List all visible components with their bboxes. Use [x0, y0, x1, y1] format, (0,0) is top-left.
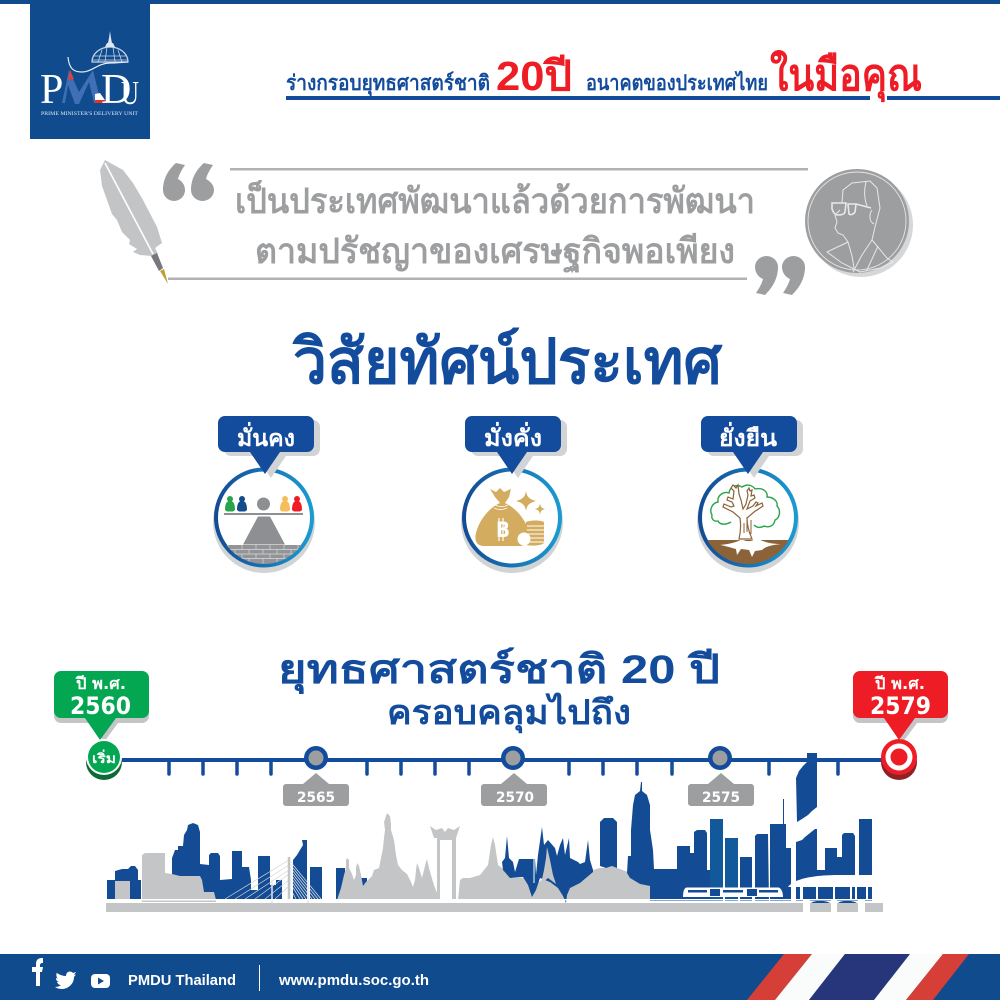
- milestone 2575: [688, 746, 754, 806]
- website: www.pmdu.soc.go.th: [278, 973, 429, 989]
- end callout 2579: 2579: [870, 692, 931, 720]
- elevated station: [788, 875, 872, 900]
- section heading: strategy 20 years: ครอบคลุมไปถึง: [387, 692, 631, 734]
- flag stripes: [747, 954, 969, 1000]
- start marker: เริ่ม: [92, 749, 116, 766]
- icon: twitter: [55, 972, 76, 989]
- section heading: strategy 20 years: ยุทธศาสตร์ชาติ 20 ปี: [278, 647, 720, 695]
- quote rules: [168, 168, 808, 280]
- quote text: เป็นประเทศพัฒนาแล้วด้วยการพัฒนา: [235, 179, 755, 221]
- closing quote mark: [755, 256, 805, 295]
- icon: Wat Arun temple: [337, 813, 438, 900]
- milestone 2570: 2570: [496, 790, 534, 806]
- header title: ร่างกรอบยุทธศาสตร์ชาติ: [286, 71, 490, 97]
- logo: PMDU: PRIME MINISTER'S DELIVERY UNIT: [41, 112, 138, 117]
- section heading: strategy 20 years: [278, 647, 720, 734]
- header title: [286, 49, 922, 103]
- gray temple right: [458, 837, 651, 900]
- icon: youtube: [91, 974, 110, 988]
- end marker: [881, 739, 917, 780]
- milestone 2565: [283, 746, 349, 806]
- milestone 2565: 2565: [297, 790, 335, 806]
- top bar: [0, 0, 1000, 4]
- header rule: [286, 96, 1000, 100]
- quote text: ตามปรัชญาของเศรษฐกิจพอเพียง: [255, 232, 735, 274]
- header title: 20ปี: [496, 53, 572, 99]
- start callout 2560: [54, 671, 149, 742]
- social handle: PMDU Thailand: [128, 973, 236, 989]
- milestone 2575: 2575: [702, 790, 740, 806]
- vision item: ยั่งยืน: ยั่งยืน: [719, 421, 777, 451]
- monorail train: [683, 888, 783, 897]
- icon: royal portrait coin: [805, 169, 913, 277]
- vision item: มั่นคง: [213, 416, 320, 573]
- vision item: มั่งคั่ง: มั่งคั่ง: [484, 421, 542, 451]
- gray buildings left: [115, 853, 216, 902]
- vision item: มั่นคง: มั่นคง: [237, 421, 295, 451]
- start marker: [86, 739, 122, 780]
- ground: [106, 903, 883, 912]
- vision item: มั่งคั่ง: [461, 416, 567, 573]
- timeline: [120, 758, 885, 774]
- header title: ในมือคุณ: [770, 49, 922, 103]
- vision item: มั่งคั่ง: B: [496, 518, 510, 542]
- logo: PMDU: [30, 3, 150, 139]
- icon: Giant Swing: [430, 826, 460, 900]
- vision item: ยั่งยืน: [697, 416, 803, 573]
- logo: PMDU: P: [40, 67, 63, 113]
- blue buildings left: [107, 823, 367, 900]
- quote text: [235, 179, 755, 274]
- milestone 2570: [481, 746, 547, 806]
- main heading: วิสัยทัศน์ประเทศ: [292, 327, 724, 397]
- opening quote mark: [163, 163, 214, 201]
- end callout 2579: [853, 671, 948, 742]
- blue temple: [502, 818, 617, 903]
- icon: feather quill: [100, 160, 168, 284]
- icon: Rama VIII bridge: [225, 857, 321, 903]
- icon: facebook: [32, 958, 43, 986]
- header title: อนาคตของประเทศไทย: [586, 70, 768, 95]
- logo: PMDU: U: [121, 75, 139, 112]
- start callout 2560: ปี พ.ศ.: [75, 674, 126, 693]
- blue towers right: [627, 782, 872, 901]
- logo: PMDU: D: [101, 67, 131, 113]
- footer bar: [0, 954, 1000, 1000]
- start callout 2560: 2560: [70, 692, 131, 720]
- end callout 2579: ปี พ.ศ.: [874, 674, 925, 693]
- skyline illustration: [106, 753, 883, 912]
